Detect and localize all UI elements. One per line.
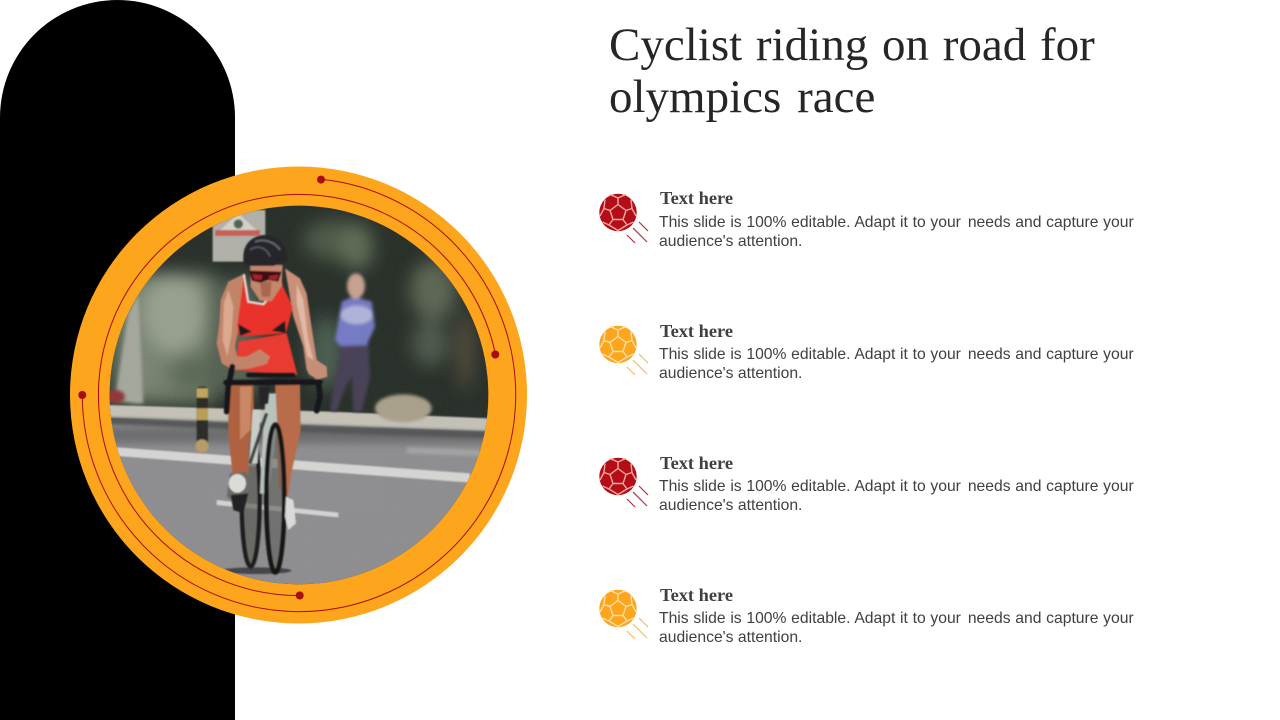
face bbox=[250, 265, 283, 301]
bystander bbox=[330, 273, 375, 412]
title: olympics race bbox=[609, 71, 875, 123]
rider and bike bbox=[217, 235, 327, 572]
circular photo frame bbox=[70, 166, 527, 624]
hand bbox=[306, 370, 314, 378]
shorts bbox=[237, 333, 297, 375]
sunglasses bbox=[249, 271, 282, 283]
shoes bbox=[226, 471, 248, 500]
grain overlay bbox=[110, 206, 488, 582]
text block: audience's attention. bbox=[659, 233, 802, 250]
left pale post bbox=[115, 295, 143, 403]
inner thin arc bbox=[98, 194, 496, 596]
text block: audience's attention. bbox=[659, 629, 802, 646]
jersey bbox=[237, 275, 293, 337]
black arch shape bbox=[0, 0, 235, 720]
cyclist photo bbox=[110, 206, 488, 584]
item 2 bbox=[599, 321, 1134, 382]
icon: red ball bbox=[599, 458, 648, 508]
road shadow bbox=[222, 567, 292, 574]
curb bbox=[107, 405, 490, 432]
sand mound bbox=[375, 394, 432, 422]
bike frame bbox=[260, 393, 277, 493]
text block: This slide is 100% editable. Adapt it to your needs and capture your bbox=[659, 478, 1134, 495]
helmet bbox=[243, 235, 288, 266]
item 4 bbox=[599, 585, 1134, 646]
item 3 bbox=[599, 453, 1134, 514]
arms bbox=[217, 274, 270, 370]
road bbox=[111, 420, 487, 584]
text block bbox=[659, 214, 1134, 250]
road lines bbox=[117, 447, 470, 483]
text block: audience's attention. bbox=[659, 365, 802, 382]
text block: audience's attention. bbox=[659, 497, 802, 514]
icon: orange ball bbox=[599, 590, 648, 640]
text block: This slide is 100% editable. Adapt it to your needs and capture your bbox=[659, 610, 1134, 627]
legs bbox=[228, 380, 254, 475]
photo background bbox=[110, 206, 488, 584]
icon: red ball bbox=[599, 194, 648, 244]
text block bbox=[659, 478, 1134, 514]
bollard bbox=[195, 387, 209, 453]
text block bbox=[659, 610, 1134, 646]
ring dots bbox=[78, 176, 499, 600]
title bbox=[609, 19, 1095, 123]
orange ring bbox=[70, 166, 527, 624]
rear wheel bbox=[242, 433, 260, 567]
heading: Text here bbox=[660, 321, 733, 341]
title: Cyclist riding on road for bbox=[609, 19, 1095, 71]
text block bbox=[659, 346, 1134, 382]
heading: Text here bbox=[660, 188, 733, 208]
outer thin arc bbox=[82, 179, 516, 612]
item 1 bbox=[599, 188, 1134, 250]
text block: This slide is 100% editable. Adapt it to your needs and capture your bbox=[659, 346, 1134, 363]
heading: Text here bbox=[660, 585, 733, 605]
icon: orange ball bbox=[599, 326, 648, 376]
front wheel bbox=[266, 424, 284, 572]
text block: This slide is 100% editable. Adapt it to your needs and capture your bbox=[659, 214, 1134, 231]
road sign bbox=[213, 210, 265, 262]
handlebar bbox=[226, 367, 320, 412]
heading: Text here bbox=[660, 453, 733, 473]
